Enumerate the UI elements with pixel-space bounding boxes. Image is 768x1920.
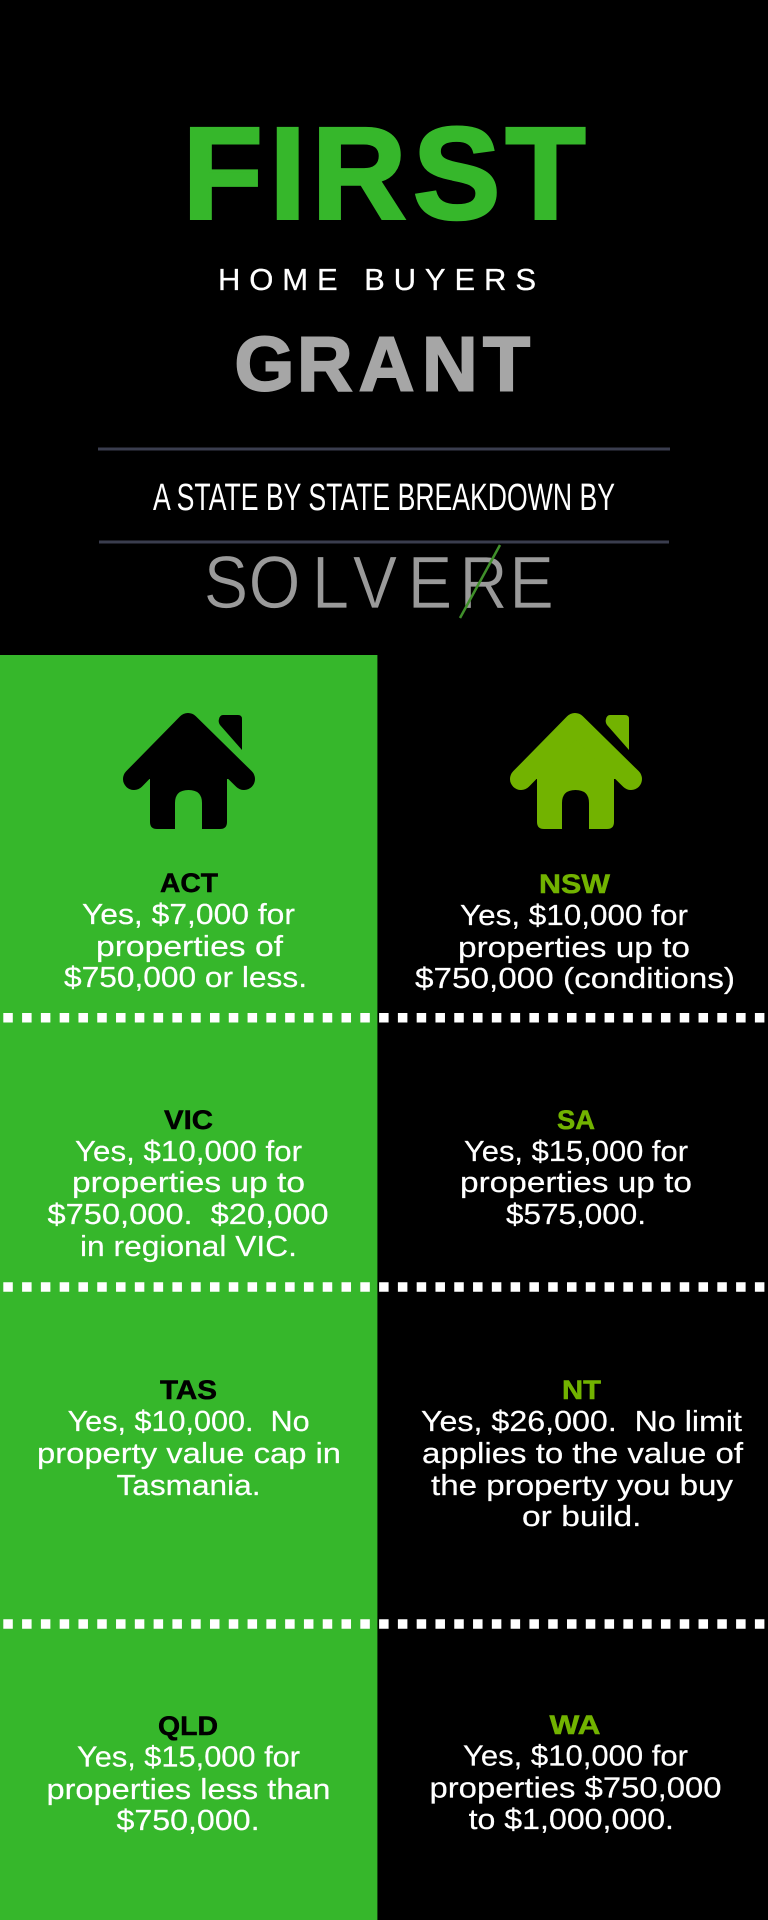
cell: QLD: $750,000. [116, 1805, 260, 1837]
cell: NSW: Yes, $10,000 for [460, 900, 688, 932]
cell: ACT: ACT [160, 868, 219, 898]
title: FIRST: FIRST [183, 100, 586, 246]
cell: VIC: $750,000. $20,000 [48, 1199, 328, 1231]
cell: TAS: Yes, $10,000. No [68, 1406, 310, 1438]
icon: house NSW [521, 715, 631, 829]
cell: TAS [37, 1375, 341, 1502]
divider bottom [99, 540, 669, 544]
cell: SA [460, 1105, 692, 1231]
cell: ACT: Yes, $7,000 for [82, 899, 295, 931]
cell: NSW: NSW [539, 869, 611, 899]
cell: QLD [46, 1711, 330, 1837]
icon: house ACT [134, 715, 244, 829]
cell: SA: SA [557, 1105, 595, 1135]
cell: NT: or build. [522, 1501, 642, 1533]
cell: SA: Yes, $15,000 for [464, 1136, 688, 1168]
cell: WA: WA [550, 1710, 600, 1740]
cell: NSW [415, 869, 735, 995]
cell: SA: properties up to [460, 1167, 692, 1199]
cell: NT: NT [562, 1375, 602, 1405]
cell: NT: the property you buy [431, 1470, 734, 1502]
cell: VIC: in regional VIC. [80, 1231, 297, 1263]
cell: ACT: properties of [96, 931, 284, 963]
cell: VIC: VIC [164, 1105, 213, 1135]
cell: TAS: property value cap in [37, 1438, 341, 1470]
panel: green left column [0, 655, 377, 1920]
cell: WA: to $1,000,000. [469, 1804, 674, 1836]
cell: NT: Yes, $26,000. No limit [421, 1406, 742, 1438]
cell: VIC: properties up to [72, 1167, 305, 1199]
cell: TAS: TAS [160, 1375, 217, 1405]
cell: NT: applies to the value of [422, 1438, 744, 1470]
cell: QLD: QLD [158, 1711, 218, 1741]
cell: TAS: Tasmania. [116, 1470, 260, 1502]
cell: WA [430, 1710, 722, 1836]
dotted divider 3 [3, 1619, 768, 1629]
cell: NSW: $750,000 (conditions) [415, 963, 735, 995]
logo: SOLVERE: SOLVERE [204, 541, 554, 624]
cell: ACT: $750,000 or less. [64, 962, 307, 994]
subtitle: HOME BUYERS: HOME BUYERS [218, 262, 536, 297]
cell: ACT [64, 868, 307, 994]
title: GRANT: GRANT [234, 322, 530, 408]
cell: NT [421, 1375, 744, 1533]
cell: NSW: properties up to [458, 932, 690, 964]
cell: SA: $575,000. [506, 1199, 646, 1231]
cell: QLD: properties less than [46, 1774, 330, 1806]
divider top [98, 448, 670, 450]
dotted divider 2 [3, 1282, 768, 1292]
cell: WA: properties $750,000 [430, 1773, 722, 1805]
cell: QLD: Yes, $15,000 for [77, 1742, 300, 1774]
cell: WA: Yes, $10,000 for [463, 1740, 688, 1772]
cell: VIC: Yes, $10,000 for [75, 1136, 302, 1168]
cell: VIC [48, 1105, 328, 1263]
dotted divider 1 [3, 1013, 768, 1022]
